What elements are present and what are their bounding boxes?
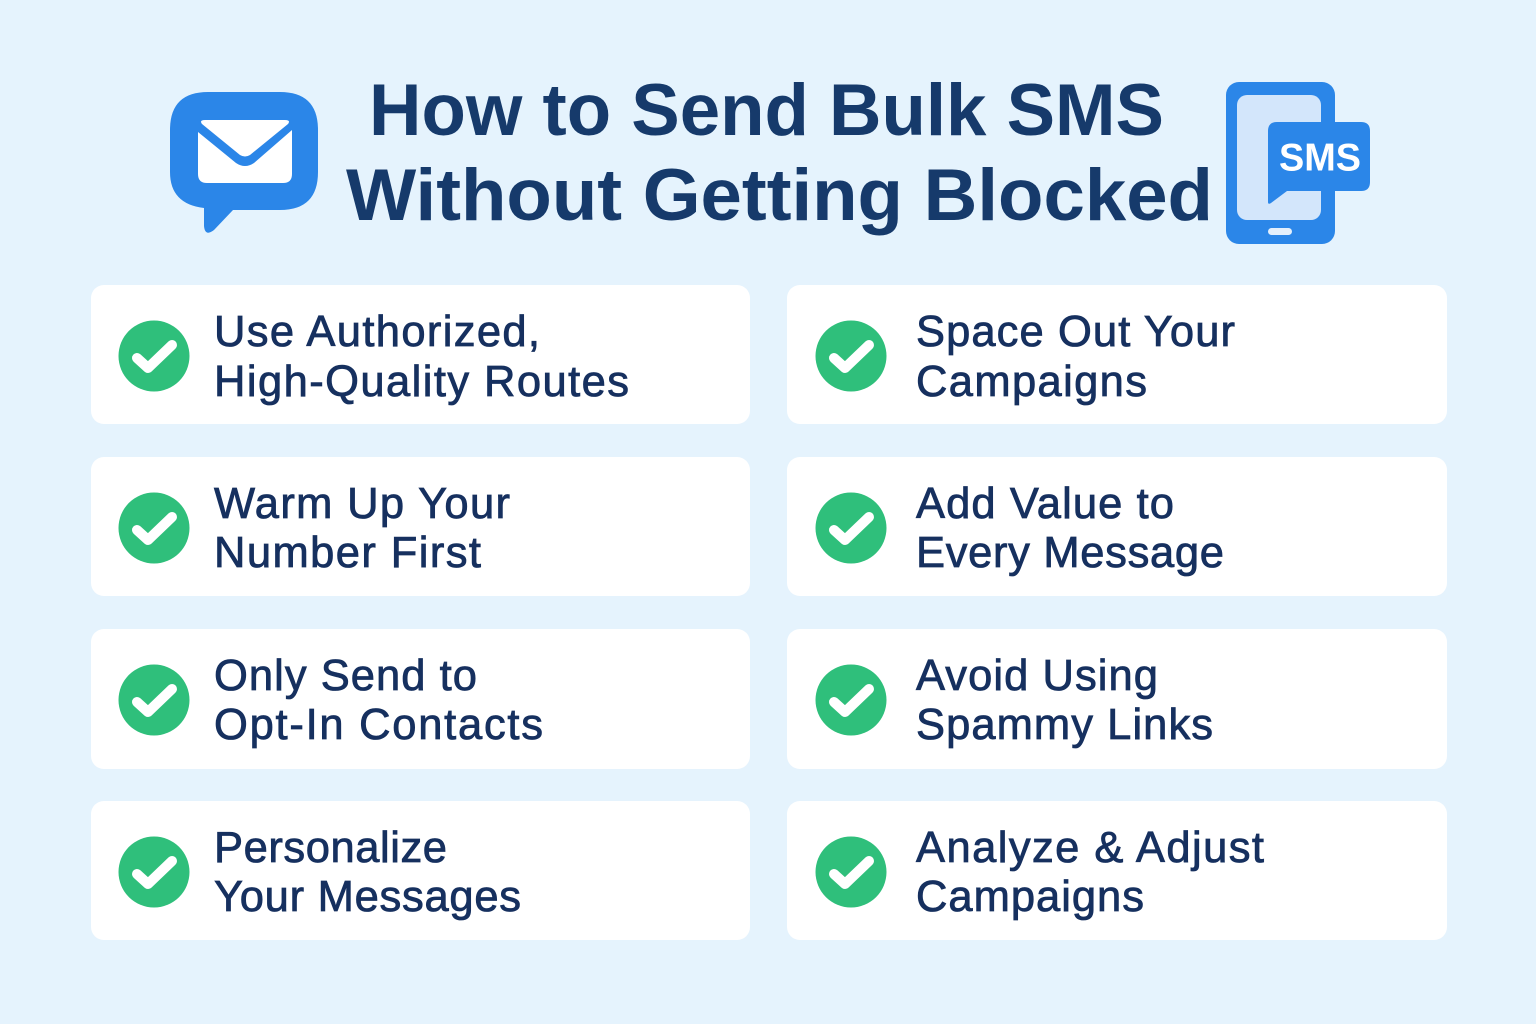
card: avoid spammy links — [787, 629, 1447, 769]
card text — [916, 652, 1213, 749]
card: opt-in contacts — [91, 629, 750, 769]
card text: Only Send to — [214, 652, 477, 700]
card text — [214, 824, 521, 921]
icon: phone with SMS bubble: SMS — [1279, 136, 1361, 180]
icon: check — [816, 664, 886, 736]
card text: Space Out Your — [916, 308, 1235, 356]
icon: check — [118, 492, 190, 564]
icon: check — [816, 492, 886, 564]
card text: Analyze & Adjust — [916, 824, 1264, 872]
card text: Personalize — [214, 824, 447, 872]
icon: check — [118, 836, 190, 908]
title: How to Send Bulk SMS — [369, 70, 1164, 151]
card text: Campaigns — [916, 873, 1144, 921]
icon: check — [816, 836, 886, 908]
card text: Spammy Links — [916, 701, 1213, 749]
card text: Your Messages — [214, 873, 521, 921]
card: space out campaigns — [787, 285, 1447, 424]
card text — [214, 480, 510, 577]
card text: Opt-In Contacts — [214, 701, 543, 749]
card text: Campaigns — [916, 358, 1147, 406]
icon: phone with SMS bubble — [1226, 82, 1370, 244]
card: add value — [787, 457, 1447, 596]
card text: Warm Up Your — [214, 480, 510, 528]
title — [346, 70, 1213, 236]
icon: email chat bubble — [170, 92, 318, 233]
icon: check — [118, 320, 190, 392]
title: Without Getting Blocked — [346, 155, 1213, 236]
card text — [916, 480, 1224, 577]
card text: Use Authorized, — [214, 308, 540, 356]
card text: Number First — [214, 529, 481, 577]
card text: Every Message — [916, 529, 1224, 577]
icon: check — [118, 664, 190, 736]
card text — [916, 308, 1235, 406]
card: warm up number — [91, 457, 750, 596]
card text: Add Value to — [916, 480, 1174, 528]
card: analyze and adjust — [787, 801, 1447, 940]
card text — [214, 652, 543, 749]
card text: Avoid Using — [916, 652, 1158, 700]
card text — [916, 824, 1264, 921]
card: use authorized routes — [91, 285, 750, 424]
card text: High-Quality Routes — [214, 358, 629, 406]
icon: check — [816, 320, 886, 392]
card text — [214, 308, 629, 406]
card: personalize — [91, 801, 750, 940]
